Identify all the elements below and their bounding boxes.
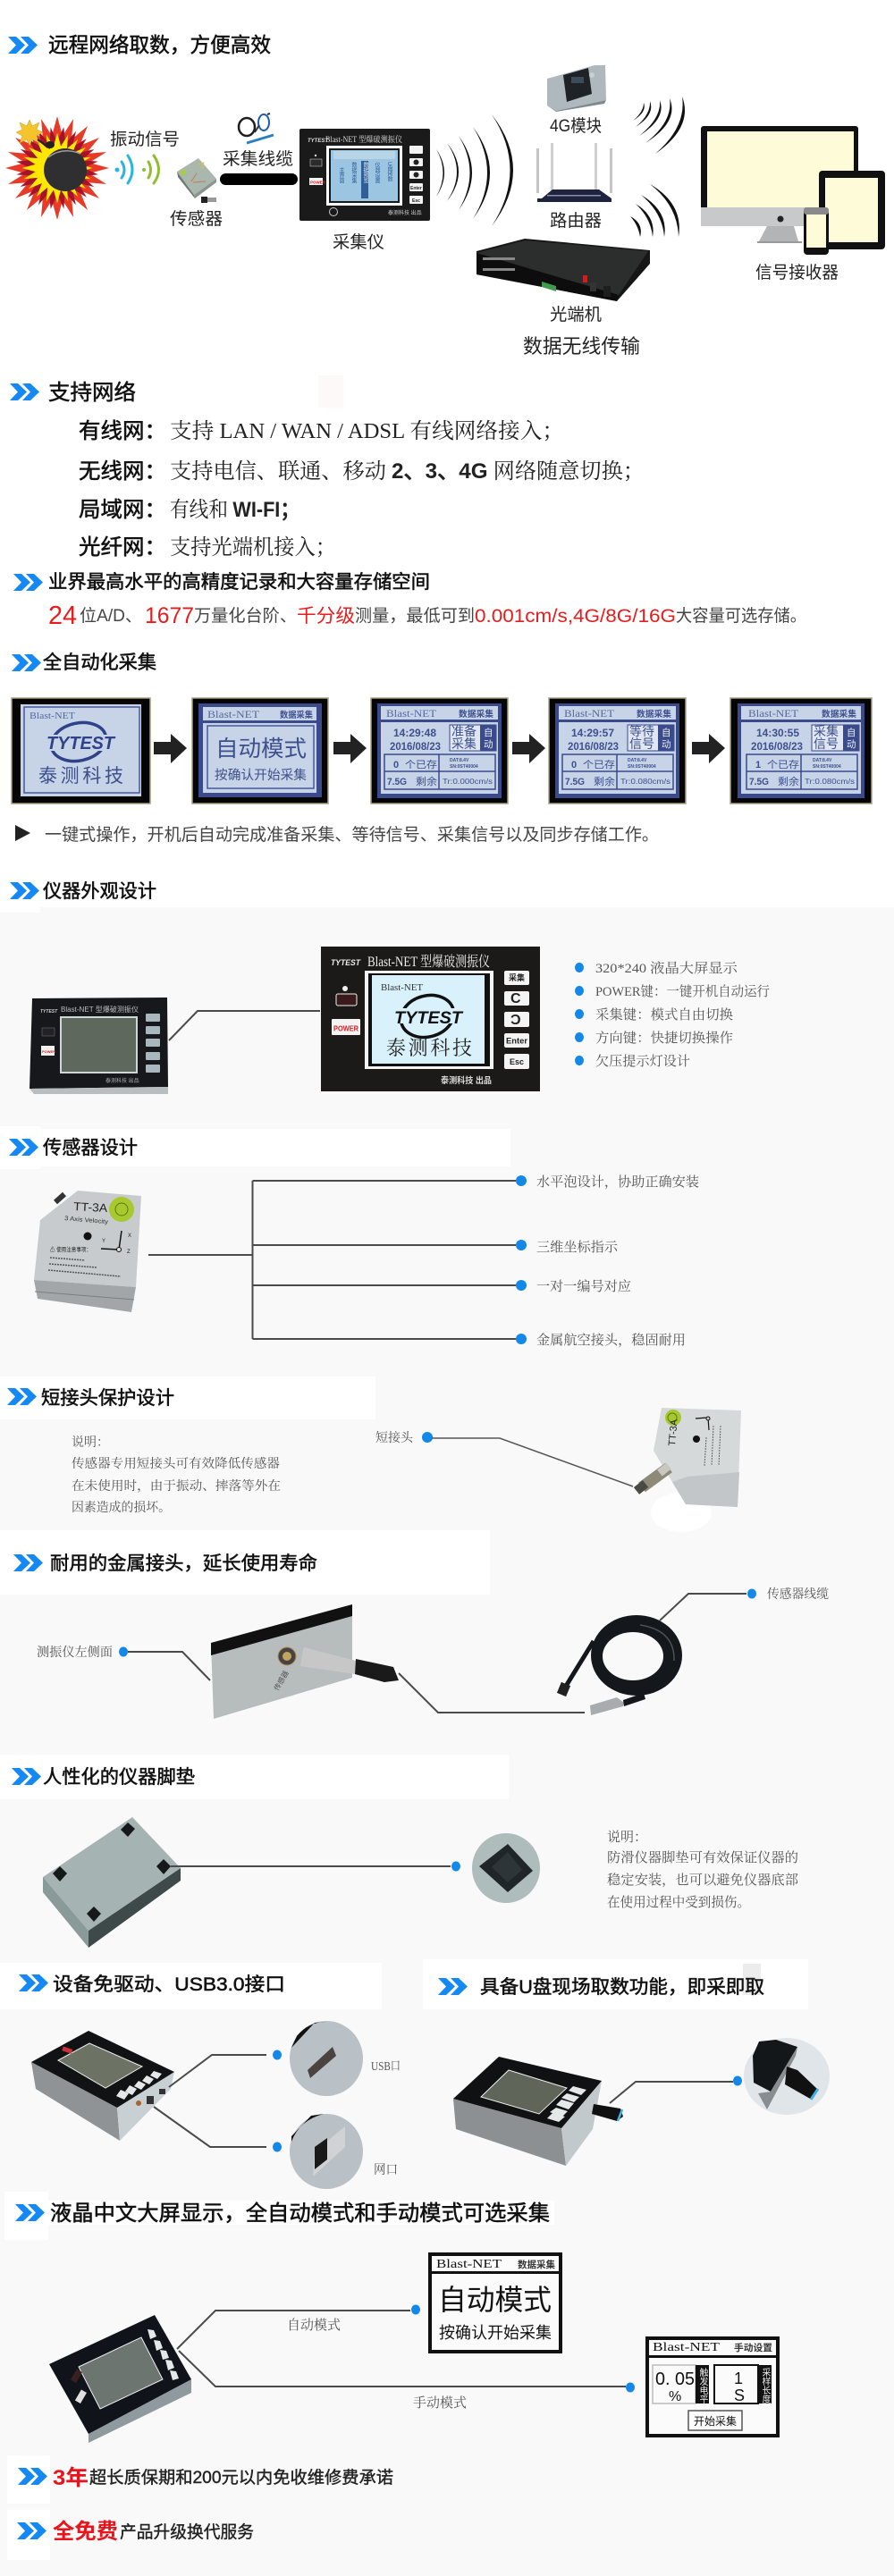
text: one-key operation: 一键式操作，开机后自动完成准备采集、等待信号、采集信号以及同步存储工作。: [45, 825, 659, 845]
lcd: logo screen: [12, 698, 150, 804]
arcs: waves to receiver upper: [633, 97, 685, 154]
lcd: logo screen: 泰测科技: [38, 766, 123, 787]
lcd: prepare acquisition: DAT:8.4V: [450, 758, 469, 763]
lcd: waiting signal: 动: [662, 739, 670, 750]
text: free upgrades: 全免费: [53, 2520, 118, 2544]
lcd: prepare acquisition: SN:0ST40004: [450, 764, 478, 770]
lcd: waiting signal: DAT:8.4V: [628, 758, 647, 763]
lcd: automatic mode: Blast-NET: [207, 708, 260, 720]
panel: instrument appearance: [10, 881, 770, 1094]
lcd: acquiring signal: 自: [847, 727, 856, 738]
screen: manual settings: 1: [734, 2370, 743, 2387]
text: LAN: 有线和 WI-FI；: [170, 498, 299, 522]
label: sensor: 传感器: [170, 209, 223, 229]
screen: manual settings: 手动设置: [734, 2342, 772, 2353]
tree connector lines: [148, 1181, 516, 1339]
lcd: waiting signal: SN:0ST40004: [628, 764, 656, 770]
lcd: waiting signal: 14:29:57: [571, 727, 614, 739]
feature list: 采集键：模式自由切换: [595, 1006, 733, 1023]
panel: supported networks: [10, 381, 645, 560]
device: metal side panel with connector: 传感器: [272, 1669, 291, 1692]
screen: manual settings: 触发电平: [697, 2367, 708, 2404]
label: USB port: USB口: [371, 2060, 401, 2074]
heading: USB disk: 具备U盘现场取数功能，即采即取: [480, 1977, 764, 1998]
lcd: acquiring signal: DAT:8.4V: [813, 758, 832, 763]
device: data collector: 主界面: [338, 166, 344, 184]
icon: tablet: [819, 171, 885, 249]
lcd: prepare acquisition: 7.5G: [387, 777, 407, 787]
lcd: acquiring signal: 7.5G: [749, 777, 769, 787]
callout: metal aviation connector: 金属航空接头，稳固耐用: [536, 1332, 686, 1348]
text: description: [72, 1435, 281, 1515]
heading: supported networks: 支持网络: [48, 381, 136, 405]
icon: heading chevrons: [12, 654, 41, 671]
screen: automatic mode: [428, 2252, 562, 2353]
heading: high precision: 业界最高水平的高精度记录和大容量存储空间: [48, 572, 430, 593]
icon: signal waves: [114, 156, 159, 183]
device: sensor with short cap: [637, 1408, 741, 1532]
text: precision specs: 位A/D、: [80, 606, 142, 626]
heading: sensor design: 传感器设计: [43, 1138, 138, 1158]
heading background: [4, 2192, 554, 2240]
heading: USB3.0: 设备免驱动、USB3.0接口: [53, 1974, 285, 1995]
heading: short connector: 短接头保护设计: [41, 1388, 174, 1409]
device: small instrument photo: TYTEST: [40, 1009, 58, 1014]
lcd: prepare acquisition: 数据采集: [459, 709, 493, 720]
lcd: prepare acquisition: 准备: [451, 724, 477, 738]
panel: short connector protection: [0, 1376, 741, 1532]
detail circle: USB stick: [744, 2038, 830, 2115]
label: optical terminal: 光端机: [550, 305, 602, 324]
heading: automatic acquisition: 全自动化采集: [43, 652, 156, 673]
icon: heading chevrons: [17, 2522, 46, 2539]
device: TT-3A sensor: Z: [127, 1250, 131, 1255]
arrow: [692, 734, 725, 763]
callout: one-to-one numbering: 一对一编号对应: [536, 1279, 631, 1294]
device: front panel detail: [321, 947, 540, 1091]
text: wireless network: 支持电信、联通、移动 2、3、4G 网络随意切换；: [170, 459, 645, 484]
feature list: 320*240 液晶大屏显示: [595, 960, 738, 976]
device: sensor cable coil: [561, 1615, 682, 1715]
lcd: prepare acquisition: 自: [484, 727, 493, 738]
callout: 3D coordinates: 三维坐标指示: [536, 1240, 619, 1255]
text: precision specs: 1677: [145, 603, 194, 628]
callout: left side of instrument: 测振仪左侧面: [37, 1645, 113, 1660]
icon: heading chevrons: [19, 1974, 48, 1991]
connector line: network: [154, 2107, 266, 2147]
label: manual mode: 手动模式: [413, 2395, 467, 2411]
device: front panel detail: 泰测科技: [386, 1037, 472, 1059]
text: description: 说明：: [72, 1435, 109, 1450]
lcd: acquiring signal: 信号: [814, 737, 839, 751]
lcd: acquiring signal: 采集: [814, 724, 839, 738]
text: 3 year warranty: [53, 2466, 393, 2490]
heading background: [423, 1959, 808, 2009]
lcd: waiting signal: 0: [571, 760, 577, 770]
panel: USB disk retrieval: [423, 1959, 830, 2166]
label: wireless data transmission: 数据无线传输: [523, 335, 640, 358]
lcd: waiting signal: 信号: [629, 737, 654, 751]
lcd: waiting signal: 个已存: [583, 758, 615, 770]
detail circle: network port: [290, 2114, 363, 2189]
heading: remote network: 远程网络取数，方便高效: [48, 33, 271, 56]
arcs: waves to receiver lower: [630, 184, 679, 237]
callout: sensor cable: 传感器线缆: [767, 1587, 829, 1602]
screen: manual settings: %: [669, 2389, 681, 2404]
lcd: waiting signal: Blast-NET: [564, 707, 615, 720]
device: small instrument photo: [30, 998, 168, 1094]
lcd: acquiring signal: [730, 698, 872, 804]
icon: bullet triangle: [15, 825, 30, 841]
arrow: [333, 734, 367, 763]
detail circle: USB port: [290, 2021, 363, 2096]
lcd: prepare acquisition: 动: [484, 739, 493, 750]
heading background: [0, 1376, 375, 1419]
callout: sensor cable: [660, 1587, 829, 1621]
lcd: waiting signal: 自: [662, 727, 670, 738]
panel: instrument foot pads: [0, 1755, 798, 1948]
device: data collector: Esc: [412, 198, 420, 204]
lcd: prepare acquisition: 0: [393, 760, 399, 770]
device: front panel detail: Esc: [510, 1057, 524, 1066]
arrow: [512, 734, 545, 763]
panel: high precision recording: [13, 572, 806, 630]
lcd: waiting signal: Tr:0.080cm/s: [620, 777, 670, 786]
text: free upgrades: [53, 2520, 254, 2544]
device: front panel detail: 采集: [509, 972, 525, 982]
lcd: acquiring signal: 个已存: [767, 758, 799, 770]
text: fibre network: 支持光端机接入；: [170, 535, 336, 560]
screen: manual settings: 开始采集: [694, 2414, 737, 2428]
screen: automatic mode: 按确认开始采集: [439, 2324, 552, 2342]
callout: short connector: 短接头: [375, 1430, 414, 1445]
heading: foot pads: 人性化的仪器脚垫: [43, 1767, 195, 1788]
icon: phone: [804, 207, 829, 255]
text: wired network: 支持 LAN / WAN / ADSL 有线网络接入；: [170, 419, 564, 443]
device: front panel detail: 泰测科技 出品: [441, 1075, 492, 1086]
text: foot pad description: 稳定安装，也可以避免仪器底部: [607, 1872, 798, 1888]
icon: cable coils: [239, 114, 274, 143]
text: LAN: 局域网：: [79, 498, 166, 522]
lcd: waiting signal: [549, 698, 686, 804]
screen: manual settings: 采样长度: [760, 2368, 771, 2404]
screen: automatic mode: 自动模式: [438, 2284, 552, 2316]
icon: desktop computer: [701, 126, 858, 243]
screen: manual settings: [645, 2336, 780, 2437]
lcd: automatic mode: 数据采集: [280, 710, 313, 720]
text: description: 因素造成的损坏。: [72, 1500, 171, 1515]
connector line: [399, 1673, 585, 1713]
panel: warranty and upgrade promises: [7, 2455, 393, 2560]
heading background: [0, 1755, 509, 1799]
connector line: USB: [169, 2055, 266, 2087]
label: acquisition cable: 采集线缆: [223, 149, 293, 169]
label: signal receiver: 信号接收器: [755, 263, 839, 282]
cable bar: [220, 173, 298, 185]
device: small instrument photo: Blast-NET 型爆破测振仪: [61, 1005, 139, 1014]
text: precision specs: 24: [48, 602, 77, 630]
screen: manual settings: S: [734, 2387, 745, 2404]
text: precision specs: 大容量可选存储。: [676, 606, 806, 626]
connector line: [169, 1011, 320, 1040]
text: foot pad description: 防滑仪器脚垫可有效保证仪器的: [607, 1850, 798, 1865]
lcd: waiting signal: 2016/08/23: [568, 740, 619, 753]
lcd: automatic mode: 自动模式: [215, 737, 307, 762]
text: fibre network: [79, 535, 336, 560]
callout: short connector: [375, 1430, 633, 1486]
device: front panel detail: Blast-NET 型爆破测振仪: [367, 954, 490, 970]
icon: heading chevrons: [438, 1978, 468, 1995]
screen: automatic mode: 数据采集: [518, 2259, 555, 2270]
feature list: [575, 960, 770, 1069]
device: TT-3A sensor: 3 Axis Velocity: [64, 1216, 109, 1225]
screen: manual settings: Blast-NET: [653, 2341, 721, 2354]
icon: heading chevrons: [7, 1388, 37, 1405]
device: data collector: U盘拷数: [386, 162, 392, 183]
device: data collector: Enter: [410, 186, 422, 191]
text: precision specs: 万量化台阶、: [194, 606, 297, 626]
text: description: 在未使用时，由于振动、摔落等外在: [72, 1478, 281, 1494]
icon: heading chevrons: [10, 882, 39, 899]
icon: small sensor: [177, 158, 216, 203]
text: free upgrades: 产品升级换代服务: [120, 2522, 254, 2542]
device: front panel detail: TYTEST: [331, 958, 361, 967]
text: LAN: [79, 498, 299, 522]
lcd: acquiring signal: Blast-NET: [748, 707, 799, 720]
icon: heading chevrons: [8, 37, 38, 54]
device: data collector: POWER: [310, 181, 326, 184]
panel: fully automatic acquisition: [12, 652, 872, 845]
label: router: 路由器: [550, 211, 602, 231]
panel: LCD display and modes: [4, 2192, 780, 2443]
device: TT-3A sensor: Y: [102, 1239, 105, 1244]
lcd: acquiring signal: 1: [755, 760, 761, 770]
feature list: POWER键：一键开机自动运行: [595, 984, 770, 999]
heading: durable connector: 耐用的金属接头，延长使用寿命: [50, 1553, 317, 1574]
arcs: wireless waves from collector: [436, 114, 513, 226]
detail circle: rubber foot: [472, 1833, 540, 1903]
lcd: prepare acquisition: 个已存: [405, 758, 437, 770]
lcd: prepare acquisition: Blast-NET: [386, 707, 437, 720]
screen: automatic mode: Blast-NET: [436, 2258, 502, 2271]
lcd: logo screen: Blast-NET: [30, 711, 75, 721]
heading background: [0, 1963, 382, 2009]
device: data collector: [299, 129, 430, 221]
icon: heading chevrons: [18, 2468, 47, 2485]
text: precision specs: 千分级: [297, 606, 355, 627]
text: precision specs: 0.001cm/s,4G/8G/16G: [475, 606, 676, 627]
device: front panel detail: Ɔ: [510, 1013, 521, 1028]
device: TT-3A sensor: ⚠ 使用注意事项：: [50, 1245, 91, 1253]
heading background: [0, 1126, 510, 1169]
lcd: acquiring signal: Tr:0.080cm/s: [805, 777, 855, 786]
lcd: automatic mode: [192, 698, 328, 804]
text: foot pad description: 说明：: [607, 1830, 647, 1845]
panel: remote network data retrieval: [5, 33, 885, 358]
label: vibration signal: 振动信号: [110, 130, 180, 149]
patch behind heading: [743, 1964, 761, 1995]
text: foot pad description: [607, 1830, 798, 1910]
text: precision specs: [48, 602, 806, 630]
heading background: [0, 1530, 490, 1595]
text: description: 传感器专用短接头可有效降低传感器: [72, 1456, 280, 1471]
lcd: logo screen: TYTEST: [46, 734, 116, 753]
lcd: prepare acquisition: 剩余: [416, 775, 437, 787]
device: underside of instrument: [43, 1817, 181, 1948]
icon: heading chevrons: [13, 574, 43, 591]
lcd: prepare acquisition: 14:29:48: [393, 727, 436, 739]
text: wired network: 有线网：: [79, 419, 166, 443]
text: foot pad description: 在使用过程中受到损伤。: [607, 1895, 750, 1910]
icon: heading chevrons: [10, 383, 39, 400]
device: front panel detail: C: [510, 991, 521, 1006]
device: front panel detail: TYTEST: [394, 1009, 463, 1028]
icon: router: [536, 143, 612, 202]
device: small instrument photo: 泰测科技 出品: [105, 1077, 139, 1084]
device: small instrument photo: POWER: [42, 1049, 55, 1054]
panel: durable metal connector: [0, 1530, 829, 1719]
lcd: automatic mode: 按确认开始采集: [215, 768, 308, 783]
device: instrument with USB stick: [453, 2057, 623, 2166]
text: 3 year warranty: 超长质保期和200元以内免收维修费承诺: [89, 2468, 393, 2488]
icon: heading chevrons: [15, 2204, 45, 2221]
device: TT-3A sensor: TT-3A: [73, 1200, 108, 1215]
device: metal side panel with connector: [211, 1604, 399, 1719]
device: data collector: 数据预览: [362, 161, 368, 184]
lcd: acquiring signal: SN:0ST40004: [813, 764, 841, 770]
panel: driver-free USB3.0: [0, 1963, 401, 2189]
connector line: [610, 2082, 733, 2103]
lcd: acquiring signal: 2016/08/23: [751, 740, 803, 753]
feature list: 方向键：快捷切换操作: [595, 1030, 733, 1046]
lcd: acquiring signal: 14:30:55: [756, 727, 799, 739]
label: network port: 网口: [374, 2163, 398, 2177]
icon: heading chevrons: [12, 1768, 41, 1785]
label: automatic mode: 自动模式: [287, 2317, 341, 2333]
icon: heading chevrons: [13, 1554, 43, 1571]
connector dot: automatic mode: [411, 2304, 420, 2315]
text: wireless network: 无线网：: [79, 459, 166, 484]
text: 3 year warranty: 3年: [53, 2466, 89, 2490]
panel: sensor design: [0, 1126, 699, 1348]
screen: manual settings: 0. 05: [655, 2370, 695, 2389]
heading background: [7, 2455, 50, 2560]
callout: level bubble: 水平泡设计，协助正确安装: [536, 1174, 699, 1190]
device: TT-3A sensor: [34, 1191, 141, 1312]
device: data collector: Blast-NET 型爆破测振仪: [325, 134, 402, 144]
device: instrument with ports: [31, 2031, 174, 2141]
connector line: [171, 1865, 451, 1867]
lcd: acquiring signal: 数据采集: [822, 709, 856, 720]
text: precision specs: 测量，最低可到: [355, 606, 475, 626]
label: 4G module: 4G模块: [550, 116, 602, 136]
heading: appearance: 仪器外观设计: [43, 881, 156, 902]
lcd: prepare acquisition: 2016/08/23: [390, 740, 441, 753]
feature list: 欠压提示灯设计: [595, 1053, 690, 1069]
icon: optical terminal: [477, 239, 650, 301]
connector dot: manual mode: [626, 2383, 635, 2392]
icon: explosion with bomb: [5, 116, 109, 220]
lcd: acquiring signal: 剩余: [778, 775, 799, 787]
lcd: waiting signal: 7.5G: [565, 777, 585, 787]
callout: left side of instrument: [37, 1645, 210, 1680]
device: data collector: 泰测科技 出品: [388, 209, 422, 216]
device: sensor with short cap: TT-3A: [667, 1418, 680, 1446]
connector dot: [733, 2075, 742, 2086]
device: TT-3A sensor: X: [128, 1233, 131, 1239]
connector dot: [451, 1861, 460, 1872]
connector dot: network: [273, 2142, 282, 2152]
lcd: waiting signal: 数据采集: [637, 709, 671, 720]
icon: heading chevrons: [9, 1139, 38, 1156]
device: data collector: 数据采集: [350, 161, 357, 184]
heading: LCD modes: 液晶中文大屏显示，全自动模式和手动模式可选采集: [50, 2201, 550, 2226]
lcd: waiting signal: 剩余: [594, 775, 615, 787]
device: instrument tilted: [49, 2315, 191, 2443]
connector: manual mode line: [179, 2351, 626, 2387]
device: front panel detail: Blast-NET: [381, 982, 423, 993]
arrow: [154, 734, 187, 763]
lcd: acquiring signal: 动: [847, 739, 856, 750]
lcd: prepare acquisition: 采集: [451, 737, 477, 751]
icon: 4G module: [547, 65, 606, 112]
device: front panel detail: POWER: [333, 1024, 358, 1033]
label: collector: 采集仪: [333, 232, 384, 252]
device: data collector: 仪器设置: [374, 162, 380, 183]
device: front panel detail: Enter: [506, 1037, 528, 1046]
lcd: waiting signal: 等待: [629, 724, 654, 738]
connector dot: USB: [273, 2050, 282, 2059]
connector: automatic mode line: [177, 2311, 410, 2349]
device: data collector: TYTEST: [308, 139, 329, 144]
lcd: prepare acquisition: [371, 698, 508, 804]
lcd: prepare acquisition: Tr:0.000cm/s: [443, 777, 493, 786]
text: fibre network: 光纤网：: [79, 535, 166, 560]
